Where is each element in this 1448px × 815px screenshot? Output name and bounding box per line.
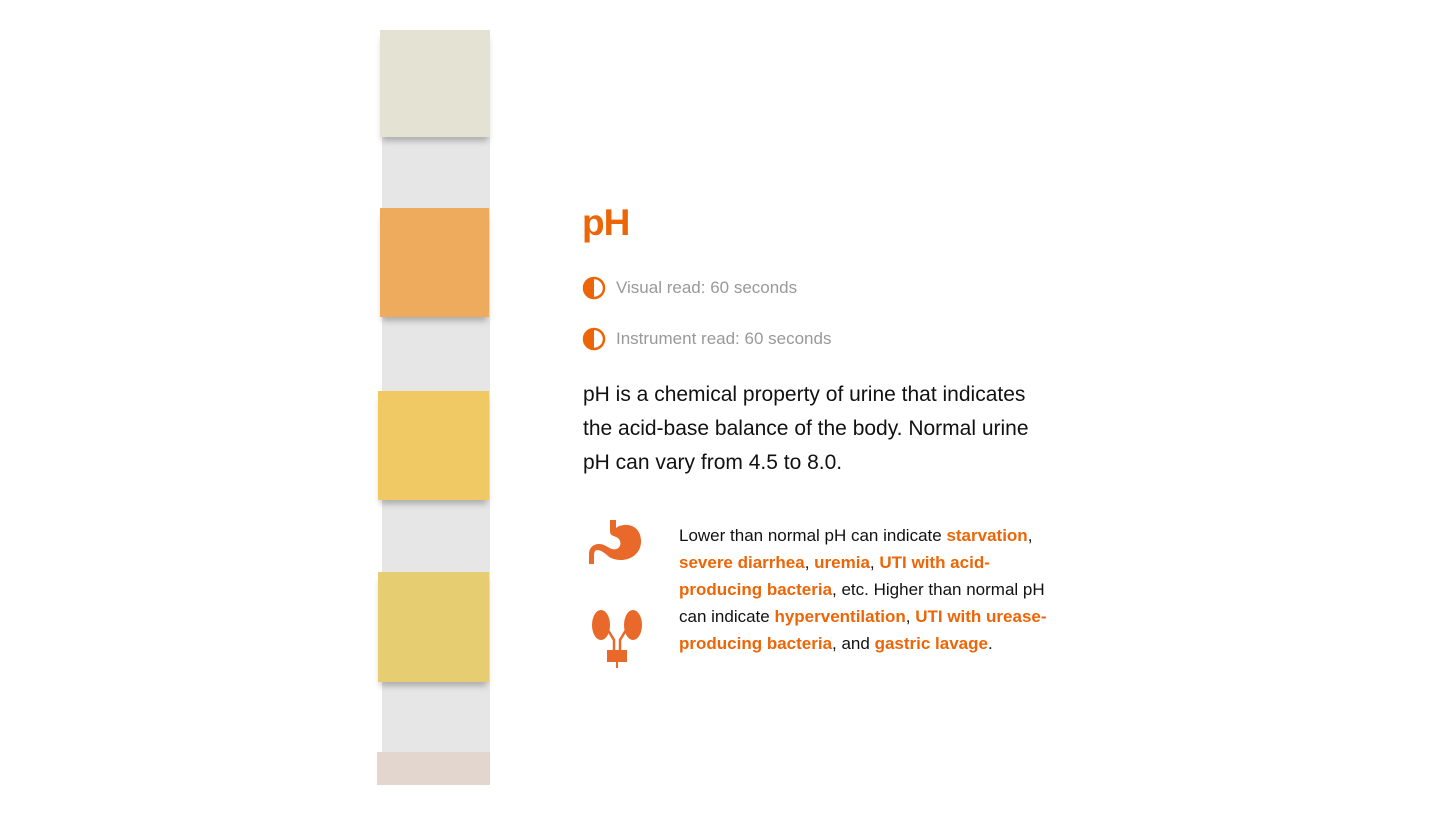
icon: half circle — [582, 276, 606, 300]
description: pH is a chemical property of urine that indicates the acid-base balance of the body. Normal urine pH can vary from 4.5 to 8.0. — [583, 383, 1029, 474]
test strip — [376, 30, 492, 785]
causes text: producing bacteria, etc. Higher than normal pH — [679, 580, 1045, 599]
causes text: severe diarrhea, uremia, UTI with acid- — [679, 553, 990, 572]
pad 2 — [380, 208, 489, 317]
visual read: Visual read: 60 seconds — [616, 278, 797, 297]
pad 5 — [377, 752, 490, 785]
icon: kidneys — [592, 610, 642, 668]
pad 1 — [380, 30, 490, 137]
icon: stomach — [589, 520, 642, 564]
instrument read: Instrument read: 60 seconds — [616, 329, 831, 348]
causes text: Lower than normal pH can indicate starvation, — [679, 526, 1032, 545]
icon: half circle — [582, 328, 606, 350]
causes text: can indicate hyperventilation, UTI with urease- — [679, 607, 1047, 626]
pad 3 — [378, 391, 489, 500]
causes text — [679, 526, 1047, 653]
visual read — [582, 276, 797, 300]
pad 4 — [378, 572, 489, 682]
title: pH — [582, 202, 629, 243]
causes text: producing bacteria, and gastric lavage. — [679, 634, 993, 653]
